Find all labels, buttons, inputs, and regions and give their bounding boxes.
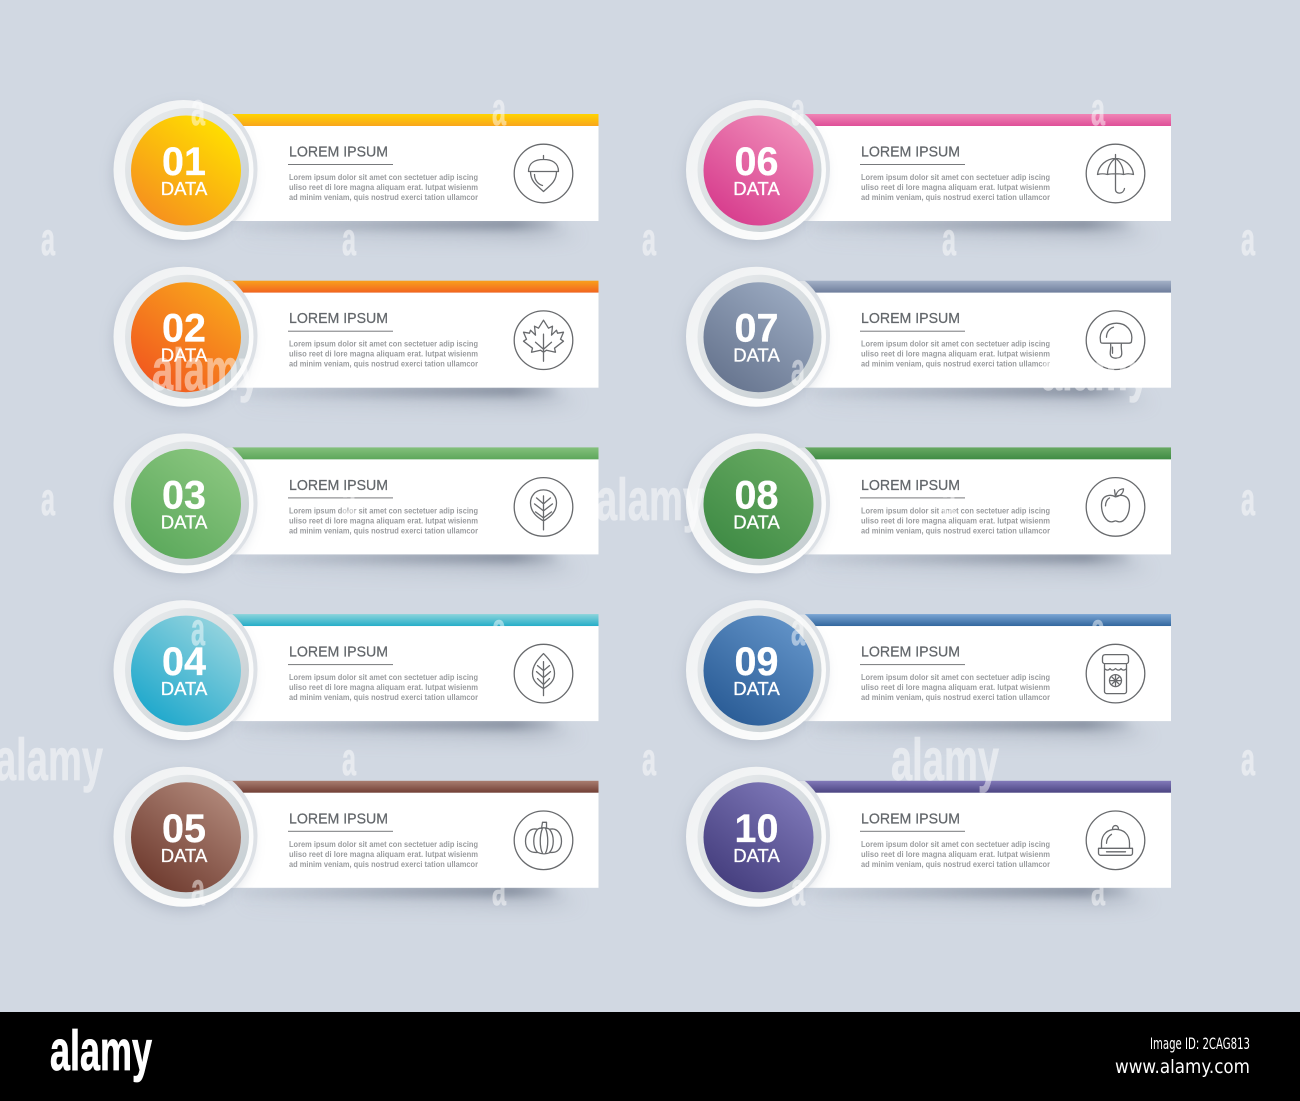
badge	[685, 430, 830, 577]
body text	[861, 340, 1050, 369]
card shadow	[240, 719, 585, 743]
icon: acorn	[514, 144, 573, 203]
color bar	[225, 114, 598, 126]
body text: uliso reet di lore magna aliquam erat. lutpat wisienm	[289, 183, 478, 192]
heading: LOREM IPSUM	[289, 644, 388, 661]
card shadow	[240, 386, 585, 410]
badge: DATA	[733, 511, 780, 532]
watermarks: a	[791, 863, 805, 915]
watermarks: a	[791, 83, 805, 135]
body text: Lorem ipsum dolor sit amet con sectetuer adip iscing	[861, 173, 1050, 182]
body text: ad minim veniam, quis nostrud exerci tation ullamcor	[861, 526, 1050, 535]
white card	[798, 459, 1171, 554]
watermarks: alamy	[152, 337, 260, 403]
body text	[861, 506, 1050, 535]
watermarks: a	[791, 343, 805, 395]
badge: DATA	[733, 845, 780, 866]
badge: 03	[162, 473, 206, 517]
watermarks: a	[342, 733, 356, 785]
badge: DATA	[161, 178, 208, 199]
color bar	[798, 781, 1171, 793]
body text: ad minim veniam, quis nostrud exerci tation ullamcor	[861, 360, 1050, 369]
color bar	[798, 614, 1171, 626]
color bar	[225, 447, 598, 459]
heading: LOREM IPSUM	[861, 477, 960, 494]
card shadow	[812, 719, 1158, 743]
badge: 02	[162, 307, 206, 351]
body text: uliso reet di lore magna aliquam erat. lutpat wisienm	[861, 183, 1050, 192]
color bar	[225, 781, 598, 793]
body text: Lorem ipsum dolor sit amet con sectetuer adip iscing	[289, 840, 478, 849]
footer band	[0, 1012, 1300, 1101]
website: www.alamy.com	[1115, 1056, 1250, 1078]
badge: 08	[735, 473, 778, 517]
badge	[112, 597, 258, 744]
heading: LOREM IPSUM	[289, 810, 388, 827]
body text: ad minim veniam, quis nostrud exerci tation ullamcor	[289, 860, 478, 869]
white card	[225, 293, 598, 388]
body text: ad minim veniam, quis nostrud exerci tation ullamcor	[861, 860, 1050, 869]
badge	[685, 263, 830, 411]
watermarks: a	[1241, 473, 1255, 525]
card shadow	[240, 552, 585, 576]
panel: step 06	[685, 96, 1171, 244]
body text: Lorem ipsum dolor sit amet con sectetuer adip iscing	[289, 506, 478, 515]
badge: DATA	[161, 678, 208, 699]
watermarks: alamy	[891, 727, 999, 793]
icon: round leaf	[514, 478, 573, 536]
watermarks: a	[1241, 213, 1255, 265]
watermarks: alamy	[596, 467, 704, 533]
icon: mushroom	[1086, 311, 1145, 370]
watermarks: alamy	[0, 727, 103, 793]
badge	[112, 96, 258, 244]
watermarks: a	[342, 213, 356, 265]
body text: uliso reet di lore magna aliquam erat. lutpat wisienm	[861, 350, 1050, 359]
badge: DATA	[733, 178, 780, 199]
heading: LOREM IPSUM	[861, 144, 960, 160]
icon: food cloche	[1086, 811, 1145, 870]
card shadow	[812, 219, 1158, 243]
badge: DATA	[161, 345, 208, 366]
body text: uliso reet di lore magna aliquam erat. lutpat wisienm	[861, 683, 1050, 692]
panel: step 10	[685, 763, 1171, 911]
badge: 04	[162, 640, 206, 684]
body text: ad minim veniam, quis nostrud exerci tation ullamcor	[289, 526, 478, 535]
watermarks: a	[1091, 863, 1105, 915]
body text	[289, 340, 478, 369]
badge: 05	[162, 807, 206, 851]
panel: step 08	[685, 430, 1171, 577]
badge: DATA	[161, 845, 208, 866]
watermarks: a	[342, 473, 356, 525]
footer logo: alamy	[50, 1019, 152, 1083]
watermarks: a	[642, 213, 656, 265]
watermarks: a	[191, 863, 205, 915]
badge	[685, 763, 830, 911]
body text: ad minim veniam, quis nostrud exerci tation ullamcor	[289, 693, 478, 702]
heading: LOREM IPSUM	[289, 144, 388, 160]
body text	[861, 673, 1050, 702]
badge: 07	[735, 307, 778, 351]
white card	[798, 293, 1171, 388]
badge	[685, 96, 830, 244]
white card	[798, 793, 1171, 888]
icon: maple leaf	[514, 311, 573, 370]
body text	[289, 506, 478, 535]
body text: Lorem ipsum dolor sit amet con sectetuer adip iscing	[289, 340, 478, 349]
white card	[798, 626, 1171, 721]
body text: Lorem ipsum dolor sit amet con sectetuer adip iscing	[289, 673, 478, 682]
watermarks: a	[41, 473, 55, 525]
badge: DATA	[733, 678, 780, 699]
color bar	[798, 447, 1171, 459]
icon: umbrella	[1086, 144, 1145, 203]
white card	[225, 626, 598, 721]
panel: step 07	[685, 263, 1171, 411]
body text	[861, 840, 1050, 869]
body text: Lorem ipsum dolor sit amet con sectetuer adip iscing	[289, 173, 478, 182]
body text: uliso reet di lore magna aliquam erat. lutpat wisienm	[289, 516, 478, 525]
badge: 01	[162, 140, 206, 184]
color bar	[225, 614, 598, 626]
white card	[225, 459, 598, 554]
badge: 06	[735, 140, 778, 184]
watermarks: a	[1241, 733, 1255, 785]
watermarks	[0, 83, 1255, 915]
color bar	[225, 281, 598, 293]
panel: step 04	[112, 597, 598, 744]
heading: LOREM IPSUM	[861, 810, 960, 827]
body text: Lorem ipsum dolor sit amet con sectetuer adip iscing	[861, 673, 1050, 682]
watermarks: a	[191, 83, 205, 135]
body text: Lorem ipsum dolor sit amet con sectetuer adip iscing	[861, 506, 1050, 515]
color bar	[798, 114, 1171, 126]
panel: step 03	[112, 430, 598, 577]
body text: uliso reet di lore magna aliquam erat. lutpat wisienm	[289, 350, 478, 359]
body text: uliso reet di lore magna aliquam erat. lutpat wisienm	[289, 850, 478, 859]
panel: step 09	[685, 597, 1171, 744]
watermarks: a	[942, 213, 956, 265]
icon: jam jar	[1086, 644, 1145, 703]
white card	[225, 126, 598, 221]
body text: ad minim veniam, quis nostrud exerci tation ullamcor	[289, 360, 478, 369]
color bar	[798, 281, 1171, 293]
watermarks: a	[492, 343, 506, 395]
badge	[112, 763, 258, 911]
body text	[861, 173, 1050, 202]
card shadow	[812, 552, 1158, 576]
body text: uliso reet di lore magna aliquam erat. lutpat wisienm	[861, 516, 1050, 525]
card shadow	[240, 886, 585, 910]
body text: Lorem ipsum dolor sit amet con sectetuer adip iscing	[861, 340, 1050, 349]
icon: pointed leaf	[514, 644, 573, 703]
heading: LOREM IPSUM	[861, 644, 960, 661]
watermarks: a	[191, 603, 205, 655]
body text: ad minim veniam, quis nostrud exerci tation ullamcor	[861, 693, 1050, 702]
badge: DATA	[161, 511, 208, 532]
watermarks: a	[1091, 83, 1105, 135]
heading: LOREM IPSUM	[861, 310, 960, 327]
body text: ad minim veniam, quis nostrud exerci tation ullamcor	[861, 193, 1050, 202]
badge	[112, 263, 258, 411]
white card	[225, 793, 598, 888]
panel: step 02	[112, 263, 598, 411]
icon: apple	[1086, 478, 1145, 536]
heading: LOREM IPSUM	[289, 477, 388, 494]
watermarks: a	[492, 863, 506, 915]
body text	[289, 673, 478, 702]
card shadow	[812, 386, 1158, 410]
watermarks: a	[1091, 603, 1105, 655]
watermarks: a	[942, 473, 956, 525]
panel: step 01	[112, 96, 598, 244]
white card	[798, 126, 1171, 221]
card shadow	[240, 219, 585, 243]
body text: ad minim veniam, quis nostrud exerci tation ullamcor	[289, 193, 478, 202]
watermarks: a	[41, 213, 55, 265]
icon: pumpkin	[514, 811, 573, 870]
watermarks: a	[642, 733, 656, 785]
body text: Lorem ipsum dolor sit amet con sectetuer adip iscing	[861, 840, 1050, 849]
badge: 10	[735, 807, 778, 851]
badge	[112, 430, 258, 577]
body text	[289, 840, 478, 869]
badge	[685, 597, 830, 744]
body text: uliso reet di lore magna aliquam erat. lutpat wisienm	[289, 683, 478, 692]
watermarks: a	[791, 603, 805, 655]
watermarks: a	[492, 603, 506, 655]
heading: LOREM IPSUM	[289, 310, 388, 327]
watermarks: alamy	[1041, 337, 1149, 403]
body text	[289, 173, 478, 202]
body text: uliso reet di lore magna aliquam erat. lutpat wisienm	[861, 850, 1050, 859]
watermarks: a	[492, 83, 506, 135]
panel: step 05	[112, 763, 598, 911]
badge: DATA	[733, 345, 780, 366]
badge: 09	[735, 640, 778, 684]
card shadow	[812, 886, 1158, 910]
